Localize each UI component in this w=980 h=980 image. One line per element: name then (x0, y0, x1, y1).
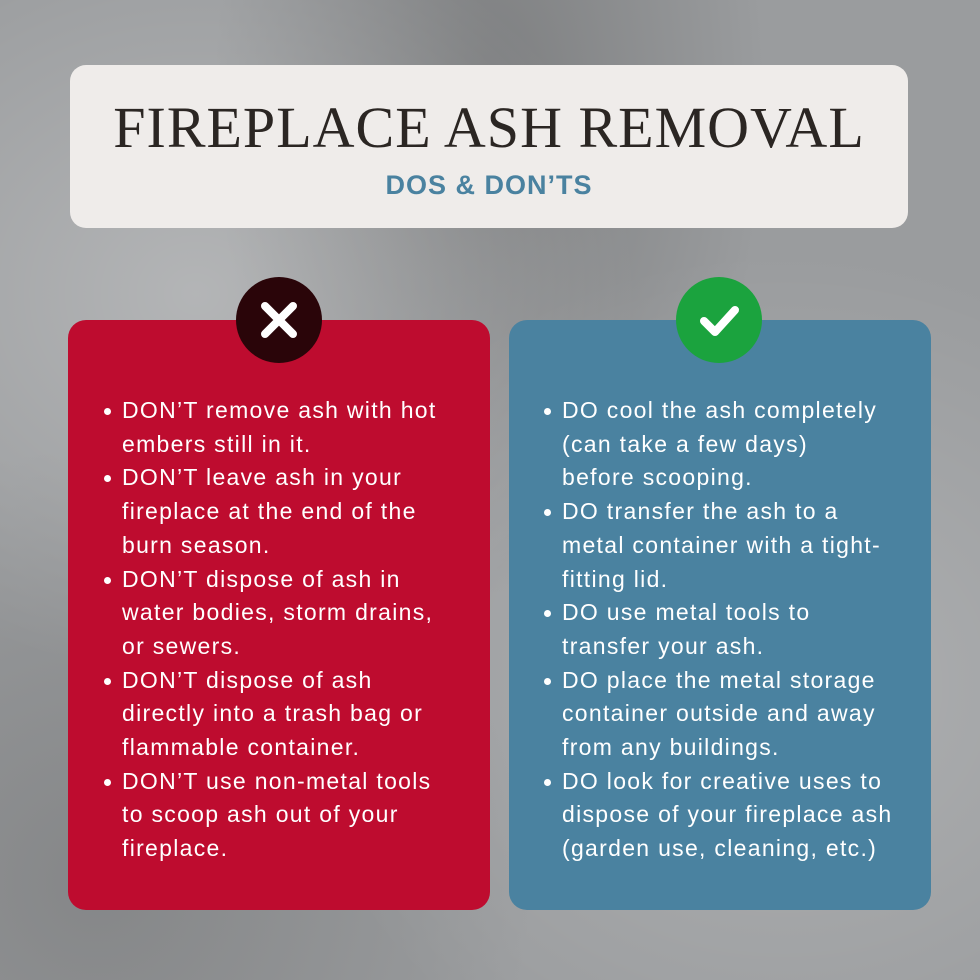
list: dos: metal container with a tight- (562, 532, 881, 558)
list: don'ts: water bodies, storm drains, (122, 599, 433, 625)
list: dos: DO place the metal storage (562, 667, 876, 693)
list: dos (544, 397, 892, 861)
list: don'ts: DON’T leave ash in your (122, 464, 402, 490)
main title: FIREPLACE ASH REMOVAL (113, 95, 865, 160)
list: dos: from any buildings. (562, 734, 780, 760)
list: dos: DO use metal tools to (562, 599, 810, 625)
list: don'ts: fireplace. (122, 835, 228, 861)
list: dos: dispose of your fireplace ash (562, 801, 892, 827)
list: dos: DO look for creative uses to (562, 768, 882, 794)
title box (70, 65, 908, 228)
list: don'ts: directly into a trash bag or (122, 700, 423, 726)
list: don'ts (104, 397, 437, 861)
list: dos: container outside and away (562, 700, 876, 726)
list: dos: (garden use, cleaning, etc.) (562, 835, 877, 861)
list: don'ts: embers still in it. (122, 431, 312, 457)
list: don'ts: flammable container. (122, 734, 360, 760)
list: don'ts: fireplace at the end of the (122, 498, 417, 524)
list: don'ts: DON’T use non-metal tools (122, 768, 431, 794)
icon: x circle (236, 277, 322, 363)
list: dos: DO transfer the ash to a (562, 498, 839, 524)
list: don'ts: to scoop ash out of your (122, 801, 399, 827)
list: don'ts: DON’T dispose of ash in (122, 566, 401, 592)
icon: check circle (676, 277, 762, 363)
list: don'ts: burn season. (122, 532, 271, 558)
list: dos: (can take a few days) (562, 431, 808, 457)
list: don'ts: DON’T dispose of ash (122, 667, 373, 693)
panel: don'ts (68, 320, 490, 910)
list: don'ts: or sewers. (122, 633, 241, 659)
list: dos: DO cool the ash completely (562, 397, 877, 423)
panel: dos (509, 320, 931, 910)
list: don'ts: DON’T remove ash with hot (122, 397, 437, 423)
list: dos: fitting lid. (562, 566, 668, 592)
list: dos: transfer your ash. (562, 633, 764, 659)
list: dos: before scooping. (562, 464, 753, 490)
subtitle: DOS & DON’TS (385, 170, 592, 200)
